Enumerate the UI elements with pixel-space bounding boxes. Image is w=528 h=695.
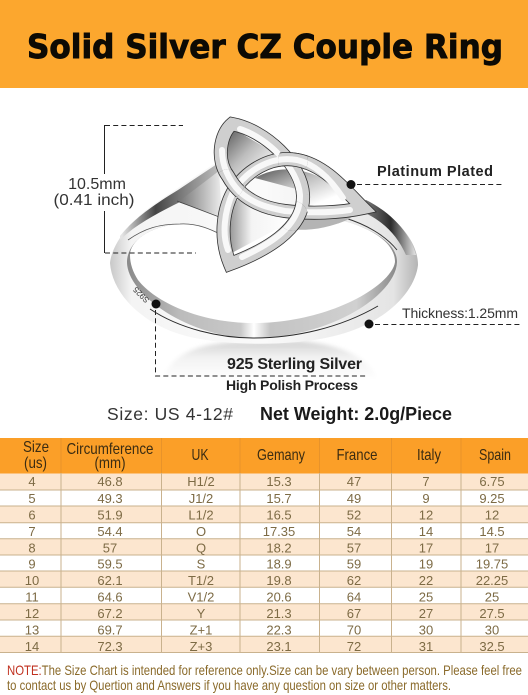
- thickness callout: Thickness:1.25mm: [402, 305, 518, 321]
- size chart note: [7, 662, 522, 693]
- ring inner surface: [127, 220, 397, 338]
- row: size 8: 57: [103, 540, 117, 556]
- row: size 11: 25: [485, 590, 499, 604]
- row: size 7: 17.35: [263, 524, 295, 539]
- band edge line: [150, 306, 378, 338]
- thickness callout: [364, 305, 520, 328]
- row: size 8: 17: [485, 540, 499, 556]
- title: Solid Silver CZ Couple Ring: [27, 27, 503, 66]
- left shank: [120, 164, 219, 240]
- row: size 14: Z+3: [190, 639, 212, 654]
- row: size 6: 12: [419, 508, 433, 522]
- row: size 10: [25, 573, 508, 588]
- row: size 4: 4: [28, 474, 36, 489]
- row: size 11: 64: [347, 590, 361, 604]
- row: size 13: 30: [419, 622, 433, 638]
- row: size 14: 23.1: [266, 639, 292, 654]
- row: size 8: Q: [196, 540, 206, 556]
- row: size 8: 17: [419, 540, 433, 556]
- table header: (mm): [94, 455, 126, 472]
- row: size 7: 7: [28, 524, 36, 539]
- row: size 14: 72: [347, 639, 361, 654]
- size and weight line: Net Weight: 2.0g/Piece: [260, 404, 452, 424]
- row: size 7: O: [196, 524, 206, 539]
- row: size 6: 12: [485, 508, 499, 522]
- row: size 7: 54: [347, 524, 361, 539]
- height value in inches: (0.41 inch): [54, 192, 134, 209]
- row: size 6: 52: [347, 508, 361, 522]
- right shank: [352, 200, 416, 255]
- row: size 4: H1/2: [187, 474, 215, 489]
- row: size 12: 27: [419, 606, 433, 621]
- row: size 13: 13: [25, 622, 39, 638]
- row: size 14: [25, 639, 505, 654]
- row: size 6: 6: [28, 508, 36, 522]
- row: size 7: 14: [419, 524, 433, 539]
- row: size 9: 59: [347, 556, 361, 572]
- row: size 10: 22.25: [476, 573, 508, 588]
- ring opening: [130, 220, 395, 323]
- row: size 12: 12: [25, 606, 39, 621]
- size chart table: [0, 438, 528, 654]
- title banner: [0, 0, 528, 88]
- platinum plated callout: Platinum Plated: [377, 164, 493, 180]
- row: size 10: 62.1: [97, 573, 123, 588]
- row: size 5: 9: [422, 491, 430, 506]
- row: size 5: [28, 491, 505, 506]
- row: size 6: 16.5: [266, 508, 292, 522]
- row: size 12: Y: [197, 606, 206, 621]
- table header: Gemany: [257, 447, 305, 464]
- table header: UK: [192, 447, 209, 464]
- row: size 6: 51.9: [97, 508, 123, 522]
- row: size 4: 6.75: [479, 474, 505, 489]
- row: size 5: 15.7: [266, 491, 292, 506]
- row: size 8: 57: [347, 540, 361, 556]
- row: size 9: 18.9: [266, 556, 292, 572]
- table header: Size: [23, 439, 49, 456]
- size and weight line: Size: US 4-12#: [107, 404, 233, 424]
- sterling silver callout: [152, 300, 367, 393]
- row: size 13: 69.7: [97, 622, 123, 638]
- row: size 4: 15.3: [266, 474, 292, 489]
- row: size 7: 14.5: [479, 524, 505, 539]
- table header: Circumference: [66, 441, 154, 458]
- row: size 11: 11: [25, 590, 39, 604]
- row: size 12: 67.2: [97, 606, 123, 621]
- row: size 13: Z+1: [190, 622, 212, 638]
- row: size 6: L1/2: [188, 508, 214, 522]
- row stripes: [0, 474, 528, 652]
- ring band: [110, 162, 418, 344]
- size and weight line: [107, 404, 452, 424]
- row: size 7: [28, 524, 505, 539]
- row: size 11: 25: [419, 590, 433, 604]
- row: size 8: 8: [28, 540, 36, 556]
- row: size 10: 10: [25, 573, 39, 588]
- row: size 8: 18.2: [266, 540, 292, 556]
- row: size 10: T1/2: [188, 573, 214, 588]
- table header: Spain: [479, 447, 511, 464]
- row: size 10: 22: [419, 573, 433, 588]
- row: size 13: 22.3: [266, 622, 292, 638]
- platinum plated callout: [346, 164, 502, 189]
- upper band edge line: [128, 224, 222, 240]
- row: size 5: 49.3: [97, 491, 123, 506]
- sterling silver callout: 925 Sterling Silver: [227, 356, 362, 373]
- row: size 14: 32.5: [479, 639, 505, 654]
- bezel under right loop: [293, 209, 362, 230]
- sterling silver callout: High Polish Process: [226, 377, 358, 393]
- trinity knot: [221, 124, 363, 264]
- fork opening: [178, 171, 222, 217]
- row: size 9: 59.5: [97, 556, 123, 572]
- row: size 11: 20.6: [266, 590, 292, 604]
- row: size 13: [25, 622, 499, 638]
- row: size 13: 70: [347, 622, 361, 638]
- row: size 4: 47: [347, 474, 361, 489]
- row: size 9: 19: [419, 556, 433, 572]
- table header: (us): [24, 455, 47, 472]
- table header: [0, 438, 528, 474]
- ring illustration: [110, 124, 418, 384]
- row: size 4: 46.8: [97, 474, 123, 489]
- row: size 14: 72.3: [97, 639, 123, 654]
- row: size 9: 9: [28, 556, 36, 572]
- table grid: [0, 438, 528, 652]
- ring reflection: [165, 341, 378, 384]
- row: size 5: 9.25: [479, 491, 505, 506]
- row: size 12: 27.5: [479, 606, 505, 621]
- row: size 9: S: [197, 556, 206, 572]
- row: size 5: 49: [347, 491, 361, 506]
- row: size 9: 19.75: [476, 556, 508, 572]
- knot crossing: upper left: [218, 169, 244, 198]
- table header: France: [336, 447, 378, 464]
- row: size 14: 31: [419, 639, 433, 654]
- row: size 12: [25, 606, 505, 621]
- table header: Italy: [417, 447, 441, 464]
- row: size 12: 21.3: [266, 606, 292, 621]
- row: size 8: [28, 540, 499, 556]
- row: size 5: 5: [28, 491, 36, 506]
- height dimension callout: [54, 125, 196, 253]
- stamp 925: S925: [131, 285, 151, 305]
- row: size 12: 67: [347, 606, 361, 621]
- row: size 6: [28, 508, 499, 522]
- knot crossing: lower right: [282, 201, 308, 231]
- row: size 11: [25, 590, 499, 604]
- row: size 7: 54.4: [97, 524, 123, 539]
- row: size 4: 7: [422, 474, 430, 489]
- height value: 10.5mm: [68, 176, 126, 193]
- row: size 10: 19.8: [266, 573, 292, 588]
- row: size 14: 14: [25, 639, 39, 654]
- row: size 4: [28, 474, 505, 489]
- row: size 9: [28, 556, 508, 572]
- row: size 11: 64.6: [97, 590, 123, 604]
- knot loop interiors: [226, 128, 290, 195]
- row: size 11: V1/2: [188, 590, 214, 604]
- knot crossing: top right: [278, 152, 308, 170]
- row: size 13: 30: [485, 622, 499, 638]
- row: size 5: J1/2: [189, 491, 213, 506]
- row: size 10: 62: [347, 573, 361, 588]
